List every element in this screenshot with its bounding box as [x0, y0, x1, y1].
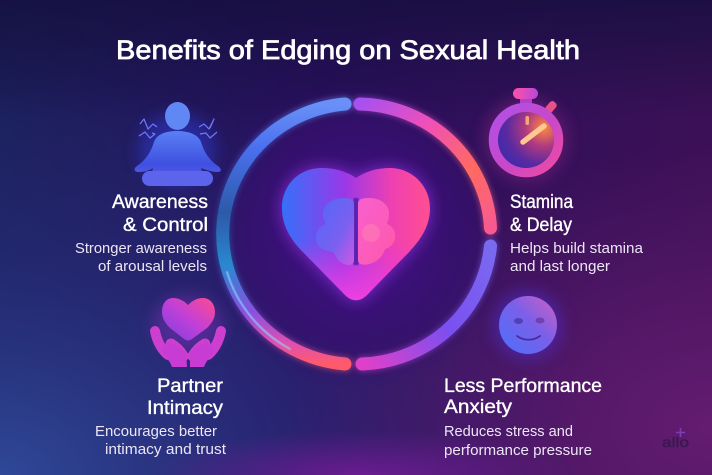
- right hand: [193, 331, 221, 356]
- case: [494, 108, 558, 172]
- icon: heart in hands: [153, 295, 223, 367]
- ring: [223, 104, 490, 364]
- tick: [526, 116, 529, 125]
- brain: left hemisphere: [316, 198, 354, 265]
- text: stamina description: and last longer: [510, 259, 610, 275]
- smile: [517, 336, 540, 340]
- text: awareness description: [75, 241, 207, 275]
- icon: central heart with brain: [282, 168, 430, 300]
- eyes: [514, 318, 523, 324]
- brain: right lobe detail: [362, 224, 380, 242]
- ring highlight: [227, 272, 290, 349]
- text: stamina description: [510, 241, 644, 275]
- icon: stopwatch: [484, 88, 568, 182]
- left hand: [155, 331, 183, 364]
- head: [165, 102, 190, 130]
- ring segment: upper right: [360, 104, 490, 228]
- text: partner description: [95, 424, 226, 458]
- heading: partner intimacy: Partner: [157, 376, 224, 397]
- text: performance description: performance pressure: [444, 443, 592, 459]
- text: partner description: Encourages better: [95, 424, 217, 440]
- stem: [520, 96, 532, 106]
- heading: stamina and delay: & Delay: [510, 215, 572, 236]
- heading: partner intimacy: Intimacy: [147, 398, 224, 419]
- text: stamina description: Helps build stamina: [510, 241, 644, 257]
- heading: less performance anxiety: Anxiety: [444, 397, 513, 418]
- heading: awareness and control: [112, 192, 208, 236]
- crown: [513, 88, 538, 99]
- energy waves: [139, 119, 217, 138]
- text: awareness description: Stronger awareness: [75, 241, 207, 257]
- ring segment: left: [223, 104, 345, 364]
- ring segment: lower right: [362, 246, 490, 364]
- text: partner description: intimacy and trust: [105, 442, 226, 458]
- face: [498, 112, 554, 168]
- brain: right hemisphere: [358, 198, 395, 265]
- legs: [142, 171, 213, 186]
- small heart: [162, 298, 215, 340]
- torso and arms: [135, 131, 221, 178]
- text: awareness description: of arousal levels: [98, 259, 207, 275]
- icon: smiley: [494, 291, 562, 359]
- heading: awareness and control: Awareness: [112, 192, 208, 213]
- text: performance description: Reduces stress and: [444, 424, 573, 440]
- heading: awareness and control: & Control: [123, 215, 208, 236]
- heading: less performance anxiety: [444, 376, 602, 418]
- hand: [523, 126, 544, 142]
- side button: [544, 100, 558, 114]
- text: performance description: [444, 424, 592, 459]
- logo: allo: [662, 428, 689, 450]
- heading: stamina and delay: [510, 192, 573, 236]
- heading: stamina and delay: Stamina: [510, 192, 573, 213]
- heading: partner intimacy: [147, 376, 224, 419]
- heading: less performance anxiety: Less Performance: [444, 376, 602, 397]
- title: Benefits of Edging on Sexual Health: [116, 35, 580, 65]
- icon: meditating figure: [135, 102, 221, 186]
- brain shadow: [354, 198, 358, 265]
- logo: allo: allo: [662, 434, 689, 450]
